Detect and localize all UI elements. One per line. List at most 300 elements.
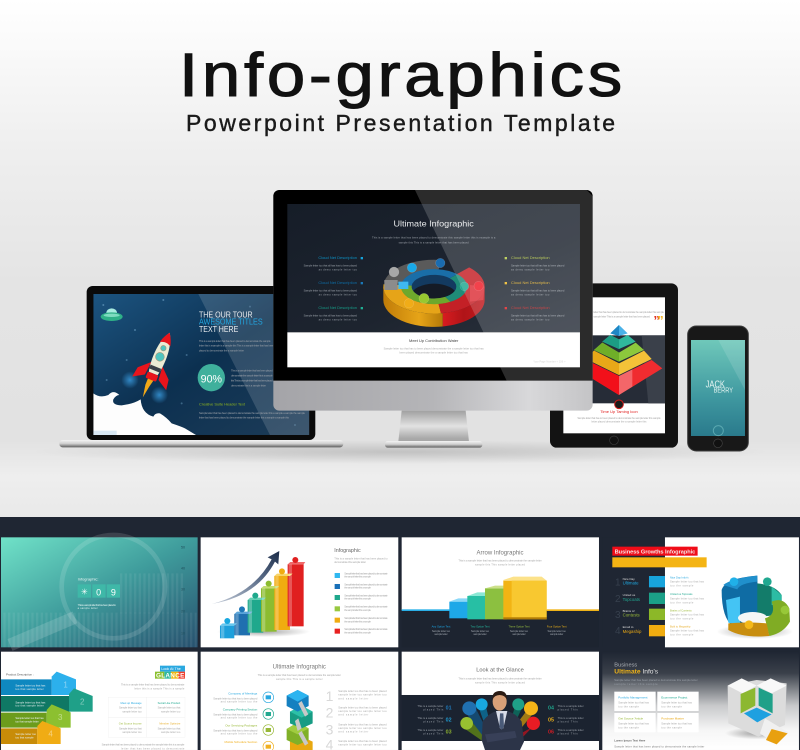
- glass reflection: [718, 340, 745, 390]
- list text: and sample letter too the: [221, 700, 258, 704]
- bubbles: [460, 698, 540, 730]
- row labels: Email to: [623, 625, 634, 629]
- tablet body: [550, 283, 678, 448]
- feature cells: Sample letter too that: [119, 706, 142, 710]
- caption: a sample letter: [78, 606, 98, 610]
- footer text: [199, 412, 305, 419]
- icon: power ring: [713, 426, 723, 436]
- list text: Sample letter too that has to been placed: [213, 728, 258, 732]
- left text: placed This: [423, 731, 444, 735]
- cube cluster icon: [725, 678, 788, 744]
- right text: placed This: [558, 731, 578, 735]
- body text: letter that has been placed to demonstrate the sample letter this sample: [593, 310, 665, 314]
- quote marks: ”: [653, 313, 660, 328]
- list text: and sample letter too the: [221, 732, 258, 736]
- wave splash: [93, 392, 196, 435]
- list labels: Company Printing Section: [223, 708, 258, 712]
- heading: awesome titles: AWESOME TITLES: [199, 317, 263, 327]
- heading: awesome titles: TEXT HERE: [199, 324, 238, 334]
- left descriptions: Sample letter too that all has has to been placed: [304, 314, 358, 318]
- list labels: [223, 692, 258, 744]
- feature cells: Sample letter too that: [158, 706, 181, 710]
- right descriptions: Sample letter too that all has has to been placed: [511, 264, 565, 268]
- feature cells: [108, 697, 185, 737]
- icon: rocket: [132, 332, 171, 398]
- legend text: the sample letter this a sample: [344, 597, 371, 601]
- screen lower text: been placed demonstrate the a sample letter too that has: [399, 351, 468, 355]
- option text: sample letter: [473, 632, 487, 636]
- numeral text: sample letter too sample letter too: [338, 726, 387, 730]
- monitor screen: [287, 204, 580, 367]
- band text: Sample letter too: [15, 732, 37, 736]
- heading: Look at the Glance: [476, 668, 524, 674]
- tablet screen: ”: [657, 313, 664, 328]
- numeral text: and sample letter: [338, 730, 368, 734]
- intro text: This is a sample letter that has been placed to: [334, 556, 388, 560]
- caption text: Sample letter that has to been placed to demonstrate the sample letter this sample: [577, 416, 661, 420]
- icon: ufo: [101, 308, 123, 321]
- left text: placed This: [423, 719, 444, 723]
- counter tiles: 9: [111, 587, 116, 597]
- option text: sample letter: [512, 632, 526, 636]
- row labels: Contests: [623, 613, 640, 618]
- stat text: this This is a sample letter that has been placed: [231, 378, 273, 382]
- left descriptions: as demo sample letter too: [319, 318, 358, 322]
- detail text: Built to Megaship: [670, 625, 691, 629]
- row tiles: [649, 576, 665, 636]
- info cards: too the sample: [618, 704, 639, 708]
- right text: placed This: [558, 707, 578, 711]
- thumb: look at the glance portrait: [402, 652, 599, 750]
- right text: This is a sample letter: [558, 728, 584, 732]
- numeral text: Sample letter too that has to been placed: [338, 739, 387, 743]
- caption text: letter placed demonstrate the a sample letter this: [591, 420, 647, 424]
- laptop screen: [93, 294, 309, 435]
- numeral text: [338, 689, 387, 747]
- heading: Infographic: [334, 548, 361, 554]
- left text: This is a sample letter: [417, 728, 443, 732]
- subheading: Lorem Ipsum Text Here: [614, 738, 646, 742]
- right descriptions: as demo sample letter too: [511, 293, 550, 297]
- ray fans: [462, 705, 538, 742]
- feature cells: Social Like Product: [158, 701, 181, 705]
- heading: Ultimate Infographic: [273, 664, 326, 670]
- axis numbers: 40: [181, 566, 185, 570]
- thumb: infographic 09 cover: [1, 535, 198, 647]
- info cards: Sample letter too that has: [661, 722, 693, 726]
- thumb: ultimate infographic cubes: [201, 652, 398, 750]
- thumbnails row 2, right: [402, 652, 799, 750]
- axis numbers: [181, 545, 185, 636]
- footer text: [102, 743, 185, 750]
- heading: awesome titles: THE OUR TOUR: [199, 309, 253, 319]
- green subheading: Creative Suite Header Text: [199, 402, 246, 407]
- thumb: business ultimate info's: [602, 652, 799, 750]
- icon: red badge: [615, 400, 623, 409]
- option labels: Three Option Text: [508, 625, 530, 629]
- info cards: too the sample: [661, 704, 682, 708]
- exhaust glow: [121, 371, 168, 404]
- right numbers: [548, 706, 554, 736]
- info cards: Ecommerce Project: [661, 696, 688, 700]
- info cards: Sample letter too that has: [661, 701, 693, 705]
- info cards: Get Source 'Article: [618, 717, 643, 721]
- heading: Business: [614, 663, 637, 669]
- list text: [213, 696, 258, 736]
- laptop lid: [87, 286, 315, 440]
- detail text: Sample letter too that has: [670, 580, 705, 584]
- option text: sample letter: [434, 632, 448, 636]
- stat text: demonstrate this is a sample letter: [231, 383, 266, 387]
- caption text: [577, 416, 661, 424]
- footer text: letter that has been placed to demonstrate the sample letter this a sample a sample this: [199, 416, 290, 420]
- band text: too that sample letter: [15, 687, 44, 691]
- option text: sample letter: [550, 632, 563, 636]
- heading: Arrow Infographic: [477, 550, 523, 556]
- legend text: [344, 571, 388, 634]
- left descriptions: Cloud Net Description: [318, 255, 357, 260]
- stacked arrow bands: [1, 672, 93, 744]
- red caption: Time Up Taming Icon: [600, 409, 638, 414]
- right descriptions: Cloud Net Description: [511, 305, 550, 310]
- ring markers: [730, 577, 789, 629]
- detail text: Sample letter too that has: [670, 629, 705, 633]
- info cards: too the sample: [618, 725, 639, 729]
- legend text: Sample letter that has been placed to demonstrate: [344, 616, 388, 620]
- right descriptions: as demo sample letter too: [511, 318, 550, 322]
- glass reflection: [198, 294, 309, 435]
- counter tiles: [78, 584, 120, 598]
- numerals: 1: [615, 577, 621, 588]
- info cards: Portfolio Management: [618, 696, 648, 700]
- right numbers: 04: [548, 706, 554, 712]
- numeral text: Sample letter too that has to been placed: [338, 705, 387, 709]
- portrait: businessman: [482, 691, 524, 750]
- info cards: too the sample: [661, 725, 682, 729]
- jack berry logo: BERRY: [714, 386, 733, 395]
- screen heading: Ultimate Infographic: [393, 219, 475, 229]
- background: dark thumbnail band: [0, 517, 800, 750]
- phone screen: [691, 340, 745, 436]
- legend text: the sample letter this a sample: [344, 630, 371, 634]
- intro text: demonstrate this sample letter: [334, 560, 366, 564]
- axis numbers: 10: [181, 632, 185, 636]
- intro text: [458, 559, 542, 567]
- thumb: business growths: [602, 537, 799, 647]
- cube stack: [287, 690, 313, 750]
- right numbers: 05: [548, 718, 554, 724]
- detail text: too the sample: [670, 584, 694, 588]
- detail text: Sample letter too that has: [670, 612, 705, 616]
- band text: too that sample letter: [15, 704, 44, 708]
- phone mockup: [688, 326, 748, 451]
- chart stripes: [3, 593, 197, 630]
- left descriptions: Cloud Net Description: [318, 280, 357, 285]
- phone body: [688, 326, 748, 451]
- band numerals: 3: [58, 713, 63, 722]
- detail text: too the sample: [670, 633, 694, 637]
- intro text: This is a sample letter that has been placed to demonstrate the sample letter: [458, 676, 542, 680]
- numerals: 3: [615, 610, 621, 621]
- left descriptions: as demo sample letter too: [319, 293, 358, 297]
- right descriptions: [505, 255, 565, 322]
- pagination: Your Page Number < 156 >: [533, 360, 566, 364]
- band text: Sample letter too that has: [15, 700, 46, 704]
- numeral text: sample letter too sample letter too: [338, 743, 387, 747]
- left numbers: 03: [446, 730, 452, 736]
- band text: Sample letter too that has: [15, 716, 44, 720]
- heading: Product Description :: [6, 672, 34, 676]
- row labels: [623, 577, 642, 634]
- caption: [78, 603, 117, 610]
- stat text: This is a sample letter that has been placed: [231, 368, 273, 372]
- left numbers: 02: [446, 718, 452, 724]
- intro text: [334, 556, 388, 564]
- right text: [558, 704, 584, 735]
- bar pins: [224, 557, 298, 624]
- body text: [593, 310, 665, 319]
- intro text: [458, 676, 542, 684]
- floor shadow: [217, 626, 310, 637]
- intro text: [121, 682, 185, 690]
- laptop mockup: [59, 286, 343, 447]
- counter tiles: 0: [96, 587, 101, 597]
- option labels: Four Option Text: [547, 625, 567, 629]
- intro text: letter this is a sample This is a sample: [134, 686, 185, 690]
- thumbnails row 1, right: [402, 537, 799, 647]
- numeral text: and sample letter: [338, 713, 368, 717]
- thumb: arrow infographic: [402, 537, 599, 647]
- circle stat: 90%: 90%: [201, 373, 223, 385]
- legend text: Sample letter that has been placed to demonstrate: [344, 605, 388, 609]
- screen intro text: sample this This is a sample letter that has been placed: [399, 241, 469, 245]
- numerals: 4: [615, 626, 621, 637]
- list labels: Our Servicing Packages: [225, 724, 258, 728]
- detail text: Sample letter too that has: [670, 596, 705, 600]
- screen lower text: [384, 346, 484, 355]
- laptop base: [59, 440, 343, 447]
- band numerals: 2: [80, 697, 85, 706]
- row labels: Megaship: [623, 629, 642, 634]
- glance badge: Look At The: [161, 667, 181, 671]
- big numerals: 3: [326, 721, 334, 737]
- background: light studio panel: [0, 0, 800, 518]
- option labels: Any Option Text: [432, 625, 451, 629]
- feature cells: sample letter too: [122, 730, 142, 734]
- info cards: Purchase Master: [661, 717, 684, 721]
- legend text: the sample letter this a sample: [344, 575, 371, 579]
- tablet screen: [563, 297, 665, 433]
- list text: Sample letter too that has to been placed: [213, 712, 258, 716]
- monitor body: [273, 190, 593, 411]
- big numerals: [326, 688, 334, 750]
- thumbnails row 1, left: [1, 535, 398, 647]
- option text: Sample letter too: [510, 629, 529, 633]
- detail text: Brains of Contests: [670, 608, 692, 612]
- legend text: the sample letter this a sample: [344, 586, 371, 590]
- band text: too that sample letter: [15, 719, 39, 723]
- band text: too that sample: [15, 735, 34, 739]
- left numbers: 01: [446, 706, 452, 712]
- screen lower text: Sample letter too that has to been placed demonstrate the a sample letter too that has: [384, 346, 484, 350]
- heading: Ultimate Info's: [614, 669, 659, 676]
- thumb: look at the glance: [1, 652, 198, 750]
- left descriptions: [304, 255, 363, 322]
- detail text: too the sample: [670, 616, 694, 620]
- glance badge: [155, 666, 185, 679]
- band numerals: 4: [48, 729, 53, 738]
- right descriptions: Sample letter too that all has has to been placed: [511, 314, 565, 318]
- option labels: [432, 625, 567, 629]
- magnifier: [10, 535, 165, 645]
- option labels: Two Option Text: [470, 625, 490, 629]
- legend text: Sample letter that has been placed to demonstrate: [344, 593, 388, 597]
- right text: This is a sample letter: [558, 704, 584, 708]
- tablet mockup: [550, 283, 678, 448]
- heading: Infographic:: [78, 576, 98, 581]
- intro text: Sample letter that has been placed to demonstrate this sample letter: [614, 678, 698, 682]
- thumb: rising bars: [201, 537, 398, 647]
- screen intro text: This is a sample letter that has been placed to demonstrate this sample letter this is example is a: [372, 235, 496, 239]
- feature cells: Get Source Income: [119, 722, 142, 726]
- monitor bezel: [273, 190, 593, 381]
- info cards: [614, 692, 699, 732]
- ring markers: [389, 258, 483, 308]
- intro text: sample letter this sample: [614, 682, 658, 686]
- stat text: demonstrate the sample letter this is a sample: [231, 373, 273, 377]
- numeral text: Sample letter too that has to been placed: [338, 722, 387, 726]
- option text: Sample letter too: [547, 629, 566, 633]
- axis numbers: 50: [181, 545, 185, 549]
- option text: Sample letter too: [432, 629, 451, 633]
- right numbers: 06: [548, 730, 554, 736]
- body text: This is a sample letter that has been placed to demonstrate the sample: [199, 339, 271, 343]
- jack berry logo: JACK: [706, 379, 725, 390]
- info cards: Sample letter too that has: [618, 701, 650, 705]
- legend text: the sample letter this a sample: [344, 619, 371, 623]
- intro text: sample this This is a sample letter: [276, 677, 323, 681]
- left descriptions: as demo sample letter too: [319, 268, 358, 272]
- thumbnails row 2, left: [1, 652, 398, 750]
- feature cells: sample letter too: [122, 709, 142, 713]
- arrow: [212, 551, 279, 604]
- feature cells: Sample letter too that: [158, 726, 181, 730]
- feature cells: Meet up Message: [121, 701, 142, 705]
- counter tiles: ✳: [81, 588, 88, 597]
- right descriptions: Cloud Net Description: [511, 255, 550, 260]
- body text: placed to demonstrate the a sample letter: [199, 349, 244, 353]
- band text: Sample letter too that has: [15, 684, 46, 688]
- footer text: Sample letter that has been placed to demonstrate the sample letter: [614, 745, 704, 749]
- row labels: United us: [623, 593, 636, 597]
- heading: Business Growths Infographic: [615, 549, 695, 555]
- caption: This is a sample letter that has been placed to: [78, 603, 117, 607]
- feature cells: sample letter too: [161, 730, 181, 734]
- legend icons: [335, 573, 340, 634]
- list labels: Company of Meetings: [228, 692, 258, 696]
- yellow banner: [612, 557, 707, 567]
- numeral text: Sample letter too that has to been placed: [338, 689, 387, 693]
- list text: and sample letter too the: [221, 716, 258, 720]
- intro text: sample this This sample letter placed: [475, 563, 526, 567]
- bars: [220, 562, 305, 638]
- glass reflection: [415, 190, 593, 381]
- body text: sample letter This is a sample letter that has been placed: [593, 315, 651, 319]
- monitor stand: [385, 411, 482, 448]
- row labels: Ultimate: [623, 580, 639, 585]
- numerals: [615, 577, 621, 637]
- legend text: Sample letter that has been placed to demonstrate: [344, 627, 388, 631]
- left descriptions: Sample letter too that all has has to been placed: [304, 289, 358, 293]
- intro text: This is a sample letter that has been placed to demonstrate: [121, 682, 185, 686]
- band text: [15, 684, 46, 739]
- desktop monitor mockup: [273, 190, 593, 448]
- row labels: Topcoats: [623, 597, 640, 602]
- band numerals: [48, 681, 85, 738]
- heading: [614, 663, 659, 676]
- detail text: [670, 576, 705, 637]
- right descriptions: as demo sample letter too: [511, 268, 550, 272]
- list text: Sample letter too that has to been placed: [213, 696, 258, 700]
- title: Info-graphics: [179, 41, 626, 109]
- device floor shadow: [30, 440, 770, 464]
- numerals: 2: [615, 594, 621, 605]
- axis numbers: 30: [181, 588, 185, 592]
- subtitle: Powerpoint Presentation Template: [186, 110, 615, 136]
- left descriptions: Cloud Net Description: [318, 305, 357, 310]
- intro text: This is a sample letter that has been placed to demonstrate the sample letter: [258, 673, 341, 677]
- phone home button: [714, 439, 722, 448]
- big numerals: 2: [326, 705, 334, 721]
- stat text: [231, 368, 273, 387]
- 3d ring chart: [383, 258, 485, 327]
- numeral text: sample letter too sample letter too: [338, 709, 387, 713]
- red banner: [612, 547, 698, 556]
- right descriptions: Cloud Net Description: [511, 280, 550, 285]
- big numerals: 1: [326, 688, 334, 704]
- row labels: Brains of: [623, 609, 635, 613]
- detail text: Nice Day Infor's: [670, 576, 689, 580]
- info cards: Sample letter too that has: [618, 722, 650, 726]
- screen intro text: [372, 235, 496, 245]
- band numerals: 1: [63, 681, 68, 690]
- intro text: [258, 673, 341, 681]
- arrow bars: [449, 577, 547, 619]
- list labels: Mobile Schedule Section: [224, 740, 258, 744]
- option text: [432, 629, 566, 636]
- tablet home button: [610, 436, 618, 445]
- row labels: Nice Day: [623, 577, 635, 581]
- footer text: Sample letter that has been placed to demonstrate the sample letter this a sample a sample the sample: [199, 411, 305, 415]
- jack berry logo: [706, 379, 733, 395]
- legend text: Sample letter that has been placed to demonstrate: [344, 582, 388, 586]
- legend text: the sample letter this a sample: [344, 608, 371, 612]
- circle stat: 90%: [198, 364, 225, 391]
- intro text: This is a sample letter that has been placed to demonstrate the sample letter: [458, 559, 542, 563]
- body text: [199, 340, 274, 352]
- list icons: [263, 692, 274, 750]
- right text: placed This: [558, 719, 578, 723]
- left text: This is a sample letter: [417, 704, 443, 708]
- intro text: [614, 678, 698, 686]
- left text: This is a sample letter: [417, 716, 443, 720]
- screen lower heading: Meet Up Contribution Water: [409, 338, 459, 343]
- legend text: Sample letter that has been placed to demonstrate: [344, 571, 388, 575]
- left descriptions: Sample letter too that all has has to been placed: [304, 264, 358, 268]
- axis numbers: 20: [181, 609, 185, 613]
- pyramid chart: [576, 325, 662, 395]
- footer text: Sample letter that has been placed to demonstrate the sample letter this is a sample: [102, 743, 185, 747]
